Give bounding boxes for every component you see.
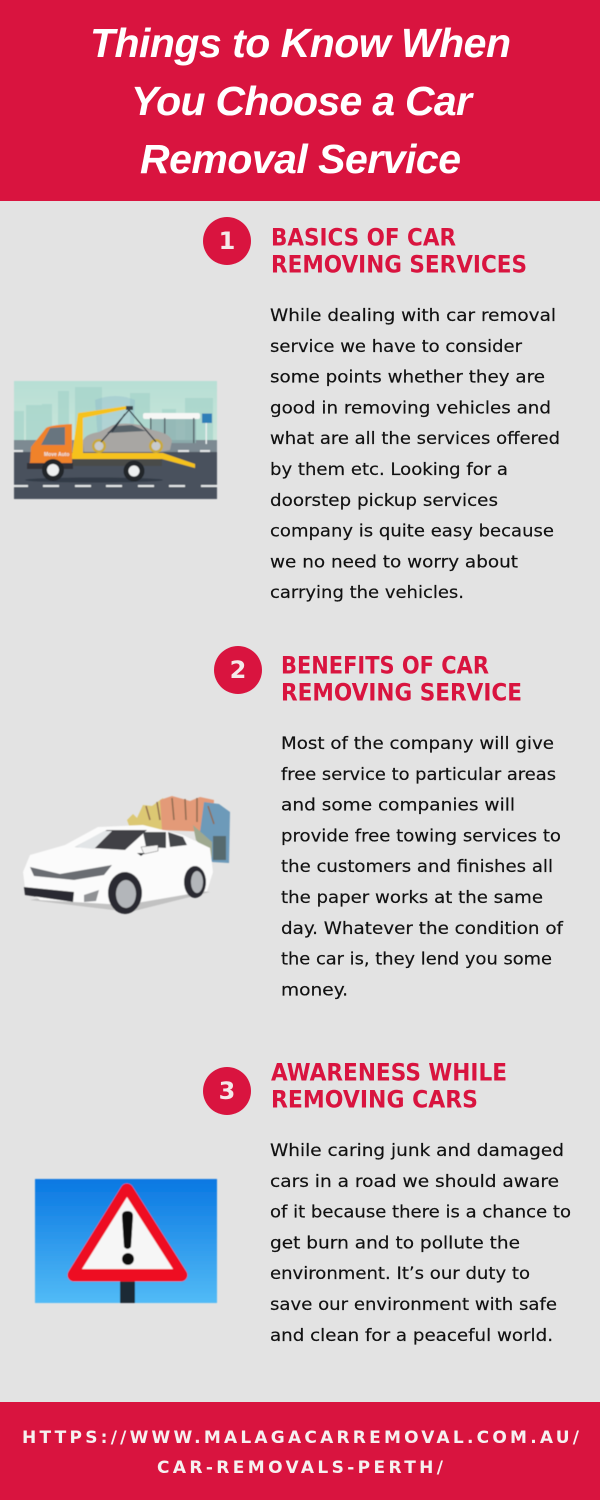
number badge 1 — [203, 217, 251, 265]
text block 2: day. Whatever the condition of — [281, 919, 564, 939]
heading 3 — [271, 1058, 507, 1114]
text block 1: carrying the vehicles. — [270, 583, 464, 603]
text block 1: good in removing vehicles and — [270, 398, 551, 418]
panel: awareness while removing cars — [35, 1058, 571, 1346]
banknote fan — [127, 796, 230, 863]
website link: HTTPS://WWW.MALAGACARREMOVAL.COM.AU/ — [22, 1428, 580, 1448]
text block 3: get burn and to pollute the — [270, 1233, 520, 1253]
website link: CAR-REMOVALS-PERTH/ — [157, 1458, 444, 1478]
heading 3: REMOVING CARS — [271, 1086, 478, 1114]
text block 2: the customers and finishes all — [281, 857, 553, 877]
text block 2: money. — [281, 980, 348, 1000]
bus shelter — [143, 413, 212, 444]
text block 2 — [281, 734, 564, 1000]
number badge 1: 1 — [219, 227, 235, 255]
text block 1: While dealing with car removal — [270, 306, 556, 326]
text block 3: While caring junk and damaged — [270, 1141, 564, 1161]
exclamation mark — [122, 1211, 134, 1265]
text block 1: what are all the services offered — [270, 429, 560, 449]
tow crane — [72, 406, 127, 455]
truck cab — [28, 424, 72, 465]
title: Things to Know When — [90, 20, 511, 66]
text block 2: and some companies will — [281, 796, 515, 816]
number badge 3 — [203, 1067, 251, 1115]
website link — [22, 1428, 580, 1478]
number badge 3: 3 — [219, 1077, 235, 1105]
text block 2: provide free towing services to — [281, 826, 561, 846]
text block 2: free service to particular areas — [281, 765, 556, 785]
text block 3: of it because there is a chance to — [270, 1203, 571, 1223]
text block 3 — [270, 1141, 571, 1346]
heading 2 — [281, 652, 522, 706]
illustration: tow truck carrying a car: Move Auto — [44, 452, 69, 458]
title: Removal Service — [140, 136, 461, 182]
heading 2: BENEFITS OF CAR — [281, 652, 489, 680]
illustration: warning road sign — [35, 1179, 217, 1303]
text block 3: and clean for a peaceful world. — [270, 1326, 553, 1346]
car body — [23, 825, 213, 905]
text block 3: environment. It’s our duty to — [270, 1264, 530, 1284]
text block 1: service we have to consider — [270, 337, 522, 357]
heading 2: REMOVING SERVICE — [281, 678, 522, 706]
text block 1: some points whether they are — [270, 368, 545, 388]
text block 3: save our environment with safe — [270, 1295, 557, 1315]
car on truck — [83, 424, 172, 452]
header banner — [0, 0, 600, 201]
flatbed — [72, 453, 195, 468]
number badge 2: 2 — [230, 656, 246, 684]
heading 1: REMOVING SERVICES — [271, 250, 527, 278]
text block 2: the car is, they lend you some — [281, 950, 552, 970]
faint watermark — [95, 396, 135, 470]
illustration: white car with banknotes — [23, 796, 230, 914]
warning triangle — [74, 1190, 181, 1275]
text block 2: Most of the company will give — [281, 734, 554, 754]
panel: benefits of car removing service — [23, 646, 564, 1000]
title — [90, 20, 511, 182]
text block 1: company is quite easy because — [270, 522, 554, 542]
text block 1: we no need to worry about — [270, 552, 518, 572]
text block 1 — [270, 306, 560, 603]
number badge 2 — [214, 646, 262, 694]
heading 1: BASICS OF CAR — [271, 224, 456, 252]
text block 1: doorstep pickup services — [270, 491, 498, 511]
road dashes — [14, 450, 217, 487]
text block 1: by them etc. Looking for a — [270, 460, 508, 480]
text block 2: the paper works at the same — [281, 888, 543, 908]
panel: basics of car removing services — [14, 217, 560, 603]
ground shadow — [30, 885, 210, 912]
footer banner — [0, 1402, 600, 1500]
illustration: tow truck carrying a car — [14, 381, 217, 499]
heading 3: AWARENESS WHILE — [271, 1058, 507, 1086]
heading 1 — [271, 224, 527, 278]
title: You Choose a Car — [131, 78, 474, 124]
text block 3: cars in a road we should aware — [270, 1172, 559, 1192]
sign post — [120, 1280, 135, 1303]
